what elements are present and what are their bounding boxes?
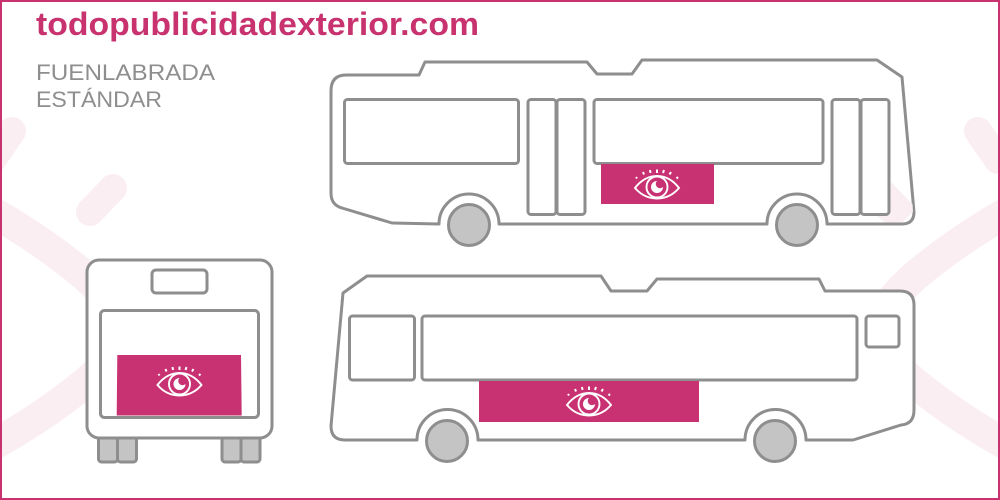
top bus body <box>331 60 914 224</box>
rear bus body <box>87 260 272 438</box>
rear bus view <box>87 260 272 462</box>
subtitle <box>36 60 215 112</box>
background decoration <box>0 131 1000 452</box>
top bus advert <box>601 164 714 204</box>
subtitle: FUENLABRADA <box>36 60 215 85</box>
bottom bus advert <box>479 381 699 422</box>
rear bus window <box>100 310 258 418</box>
top bus wheels <box>448 204 818 246</box>
top bus rear window <box>344 100 518 164</box>
bottom bus body <box>331 276 914 440</box>
bottom bus front window <box>350 316 414 380</box>
background pill seen through bus <box>876 182 913 222</box>
rear bus sign <box>152 270 207 293</box>
bottom bus small window <box>866 316 899 347</box>
rear bus tyres <box>98 432 260 462</box>
top bus doors one <box>528 100 585 214</box>
rear bus advert <box>117 355 242 416</box>
icon: eye <box>567 386 611 416</box>
bottom bus main window <box>422 316 857 380</box>
icon: eye <box>158 366 202 396</box>
top bus front window <box>594 100 823 164</box>
top bus doors two <box>832 100 889 214</box>
bottom bus wheels <box>426 420 796 462</box>
title: todopublicidadexterior.com <box>36 6 479 42</box>
bottom bus side view <box>331 276 914 462</box>
subtitle: ESTÁNDAR <box>36 87 162 112</box>
top bus side view <box>331 60 914 246</box>
icon: eye <box>635 170 679 198</box>
